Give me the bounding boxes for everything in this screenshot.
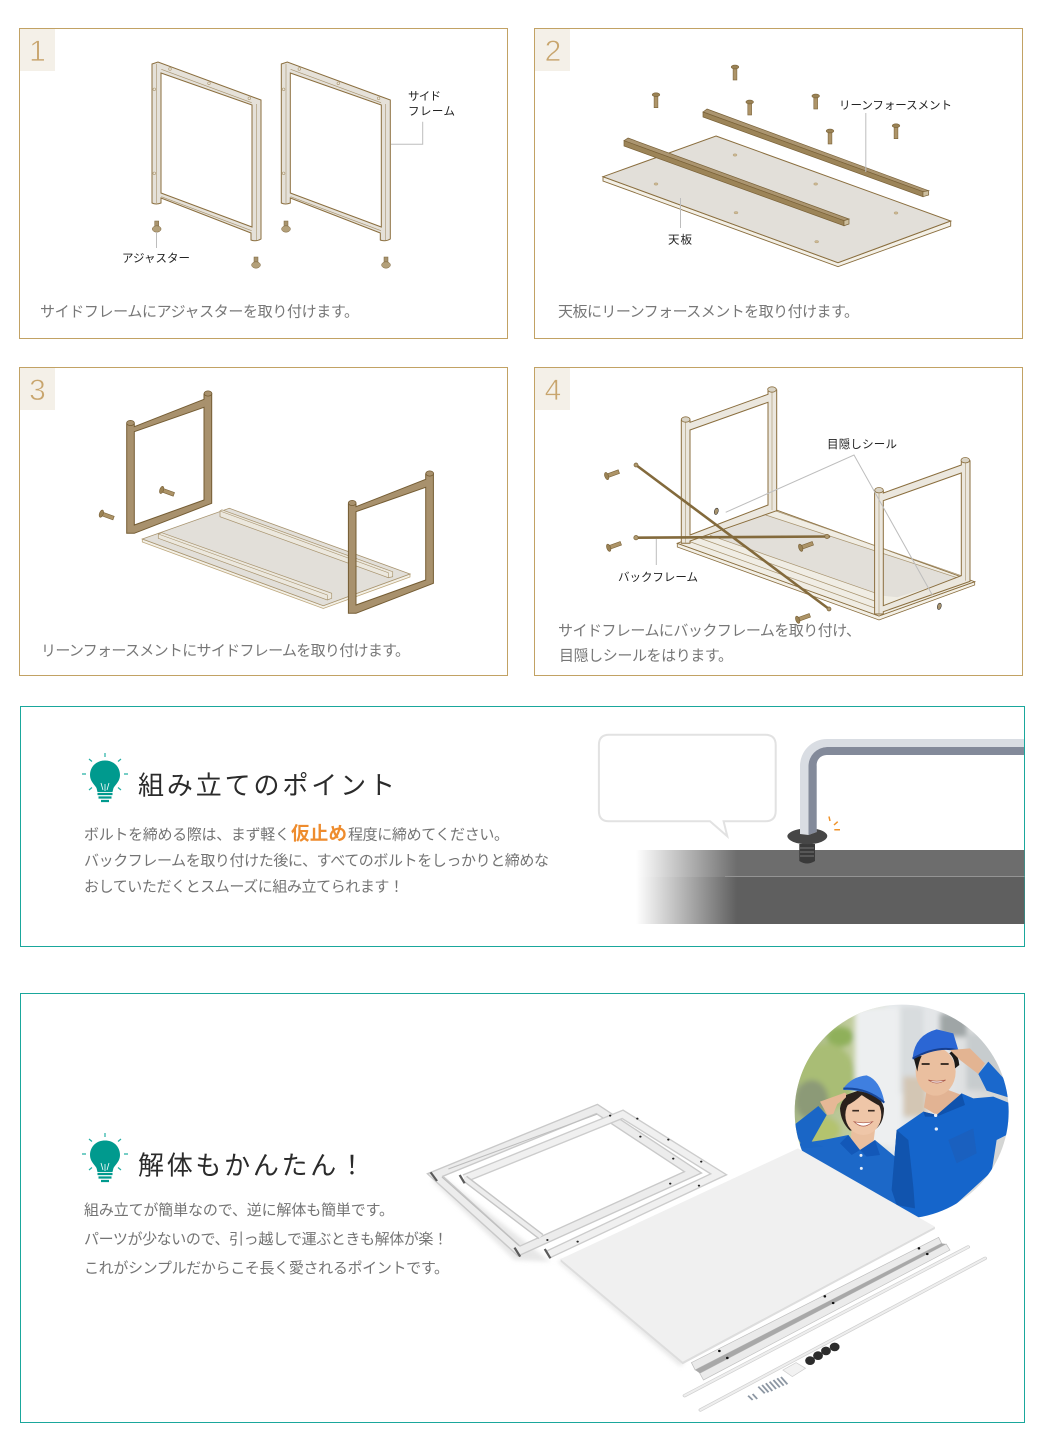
speech bubble bbox=[599, 735, 776, 836]
seal sheet bbox=[783, 1363, 806, 1377]
icon: bolts bbox=[604, 468, 814, 624]
back frame rods bbox=[685, 1247, 985, 1410]
label: adjuster: アジャスター bbox=[122, 252, 190, 265]
body text: これがシンプルだからこそ長く愛されるポイントです。 bbox=[84, 1260, 449, 1277]
soft shadow bbox=[431, 1177, 685, 1367]
step number 2 bbox=[535, 29, 570, 71]
side frame front bbox=[431, 1114, 719, 1258]
step number 4 bbox=[535, 368, 570, 410]
caption: リーンフォースメントにサイドフレームを取り付けます。 bbox=[41, 642, 410, 660]
label: cover seal: 目隠しシール bbox=[827, 438, 897, 451]
panel: easy disassembly bbox=[20, 994, 1024, 1422]
body text: パーツが少ないので、引っ越しで運ぶときも解体が楽！ bbox=[84, 1231, 448, 1248]
label: adjuster bbox=[122, 232, 190, 265]
icon: adjusters bbox=[152, 221, 390, 268]
step number 4: 4 bbox=[545, 374, 561, 407]
icon: bolt head bbox=[787, 829, 827, 864]
woman bbox=[795, 1075, 896, 1204]
body text: ボルトを締める際は、まず軽く bbox=[84, 826, 290, 844]
reinforcement rails bbox=[691, 1237, 950, 1380]
illustration: side frames bbox=[127, 391, 434, 613]
illustration: board with rails bbox=[142, 508, 410, 608]
icon: bolts bbox=[652, 65, 900, 144]
label: cover seal bbox=[726, 438, 932, 595]
heading: 解体もかんたん！ bbox=[138, 1150, 365, 1180]
label: reinforcement: リーンフォースメント bbox=[839, 100, 952, 112]
step number 3: 3 bbox=[29, 374, 46, 407]
photo background bbox=[793, 1003, 1010, 1220]
body text: おしていただくとスムーズに組み立てられます！ bbox=[84, 878, 404, 896]
illustration: hex wrench bbox=[800, 739, 1024, 835]
illustration: reinforcement bars bbox=[624, 109, 929, 226]
man bbox=[892, 1029, 1010, 1220]
panel: step 2 bbox=[534, 28, 1022, 338]
illustration: side frames bbox=[152, 62, 390, 241]
step number 3 bbox=[20, 368, 55, 410]
body text: バックフレームを取り付けた後に、すべてのボルトをしっかりと締めな bbox=[84, 852, 549, 870]
caption bbox=[558, 622, 861, 664]
caption: 天板にリーンフォースメントを取り付けます。 bbox=[558, 304, 859, 320]
icon: tightening sparks bbox=[829, 816, 840, 830]
icon: light bulb bbox=[82, 753, 128, 801]
illustration: table edge bbox=[636, 850, 1024, 924]
heading: 組み立てのポイント bbox=[138, 770, 395, 800]
label: back frame bbox=[618, 539, 698, 584]
caption: 目隠しシールをはります。 bbox=[559, 648, 733, 664]
illustration: assembled board bbox=[677, 507, 975, 620]
photo: disassembled desk parts bbox=[431, 1109, 985, 1410]
screw set bbox=[748, 1377, 787, 1400]
side frame back bbox=[435, 1109, 693, 1251]
illustration: side frames bbox=[681, 387, 970, 614]
caption: サイドフレームにバックフレームを取り付け、 bbox=[558, 622, 861, 640]
body text: 組み立てが簡単なので、逆に解体も簡単です。 bbox=[84, 1201, 394, 1219]
label: table top bbox=[668, 198, 692, 246]
icon: seals bbox=[714, 508, 942, 610]
illustration: table top board bbox=[603, 136, 951, 267]
photo: two staff members bbox=[793, 1003, 1010, 1227]
panel: step 4 bbox=[534, 368, 1022, 676]
panel: step 3 bbox=[20, 368, 508, 676]
step number 2: 2 bbox=[545, 35, 561, 68]
label: table top: 天板 bbox=[668, 232, 692, 246]
illustration: back frames bbox=[634, 463, 831, 611]
body text: 程度に締めてください。 bbox=[348, 826, 509, 844]
step number 1: 1 bbox=[29, 35, 46, 68]
caption: サイドフレームにアジャスターを取り付けます。 bbox=[40, 304, 359, 320]
adjuster knobs bbox=[805, 1343, 840, 1365]
label: side frame: サイド bbox=[408, 90, 441, 103]
icon: light bulb bbox=[82, 1133, 128, 1181]
label: side frame bbox=[391, 90, 455, 144]
label: side frame: フレーム bbox=[408, 105, 455, 118]
panel: step 1 bbox=[20, 28, 508, 338]
label: reinforcement bbox=[839, 100, 952, 172]
icon: bolts bbox=[98, 486, 175, 522]
table top bbox=[561, 1148, 935, 1364]
body text bbox=[84, 823, 549, 896]
body text bbox=[84, 1201, 449, 1277]
label: back frame: バックフレーム bbox=[618, 571, 698, 584]
panel: assembly tips bbox=[20, 706, 1024, 946]
body text: 仮止め bbox=[291, 823, 347, 844]
step number 1 bbox=[20, 29, 55, 71]
